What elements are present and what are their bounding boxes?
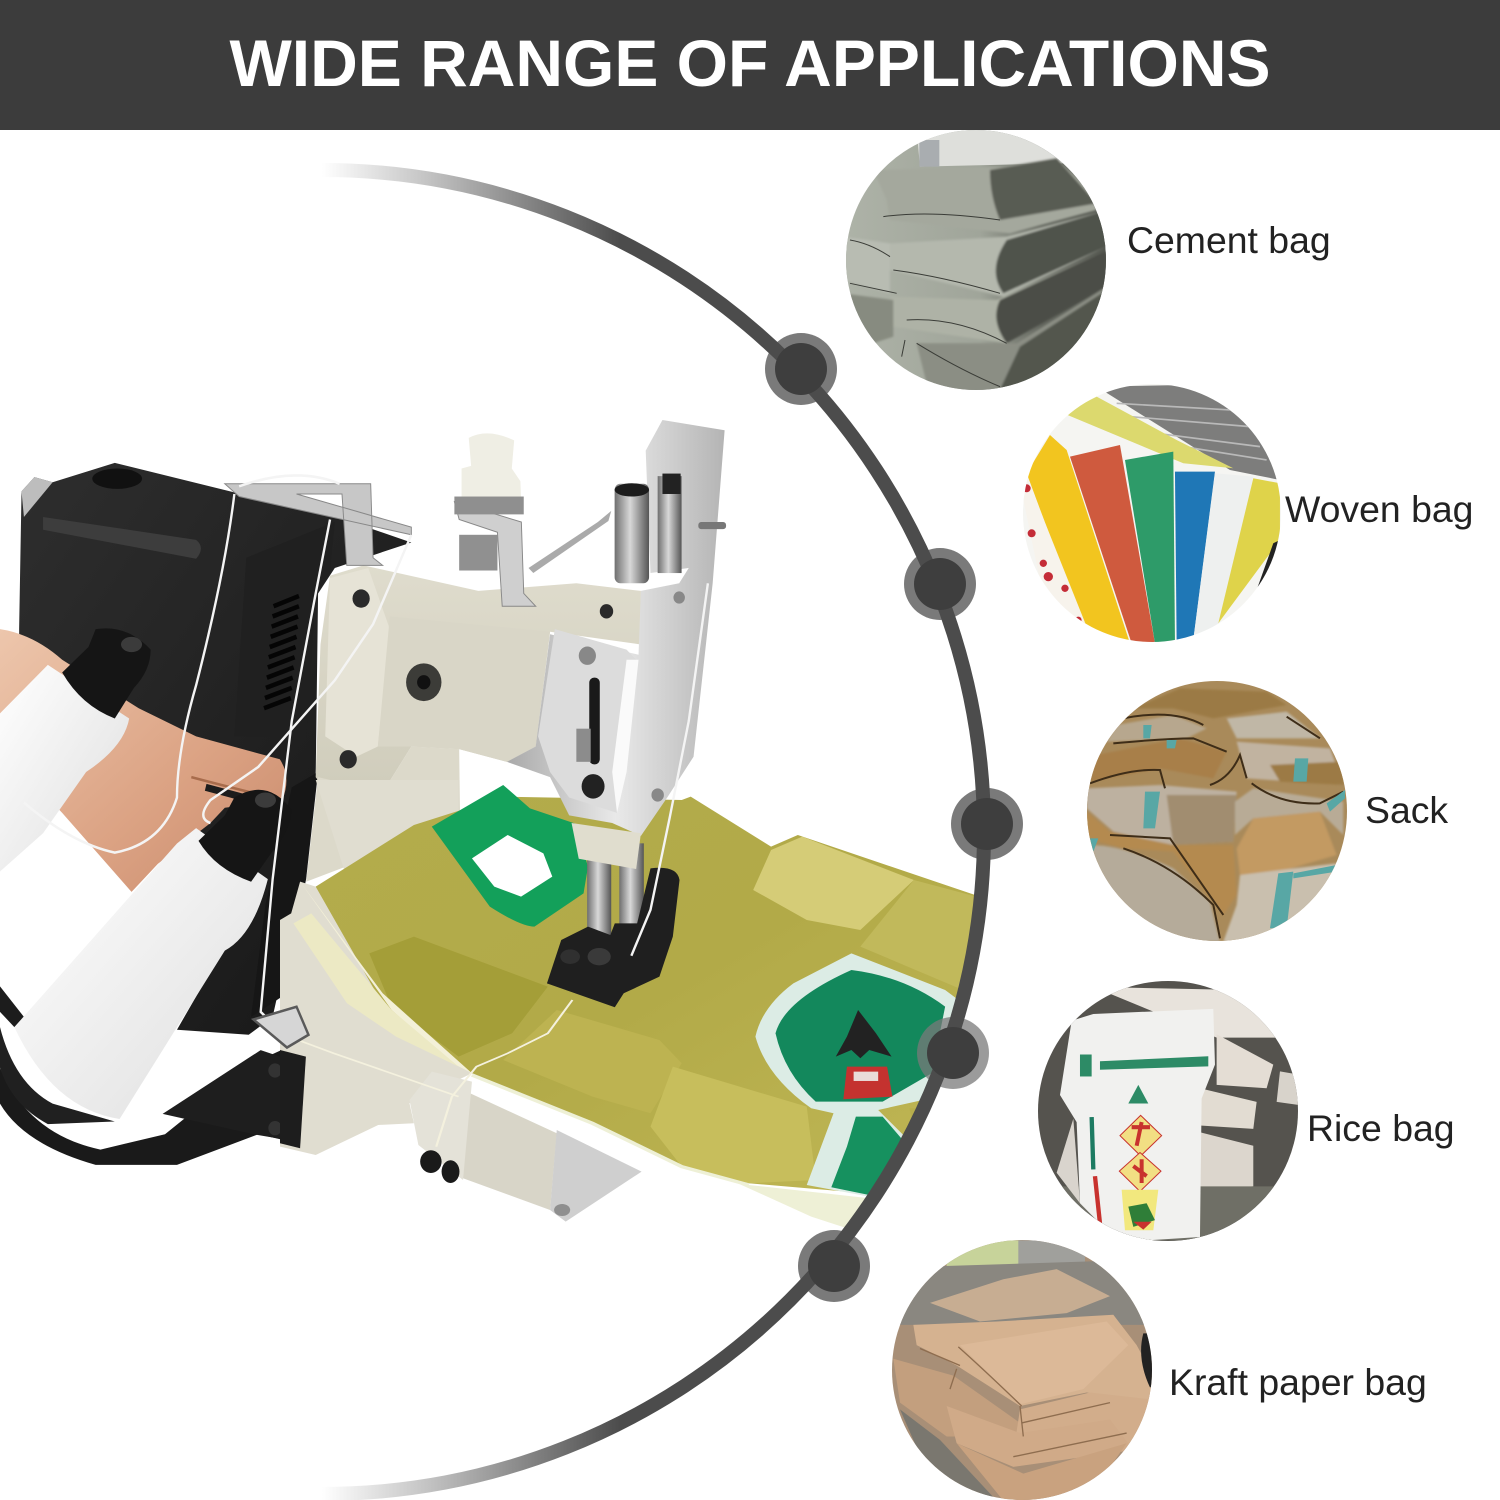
pale lower sheet [740,1184,866,1228]
label: kraft paper bag: Kraft paper bag [1169,1361,1427,1403]
header banner [0,0,1500,130]
label: woven bag: Woven bag [1285,488,1473,530]
fabric [316,797,980,1197]
needle rods [587,857,611,940]
node centres [775,343,1013,1292]
beige machine arm [316,565,641,798]
sewing thread [24,475,708,1042]
node rings [765,333,1023,1302]
bag thread [280,1000,572,1147]
green bag handle [432,785,588,927]
curved arc with node markers [322,170,1023,1494]
base casting [280,780,472,1155]
label: cement bag: Cement bag [1127,219,1331,261]
thread spools [0,628,292,1124]
base, woven bag, handle and presser foot [280,780,980,1228]
grip strap and lower handle [251,772,318,1017]
machine photo: handheld bag sewing machine [0,420,980,1228]
hand [0,629,286,892]
arc line [322,170,984,1494]
title: WIDE RANGE OF APPLICATIONS [230,26,1270,100]
label: sack: Sack [1365,789,1448,831]
photo: cement bags [846,130,1106,390]
photo: burlap sacks [1085,680,1350,945]
black motor housing [19,463,411,1035]
photo: rice bags [1035,980,1300,1245]
photo: kraft paper bags [890,1238,1157,1500]
thread guide and tension assembly [225,433,611,606]
gearbox [459,1090,557,1210]
label: rice bag: Rice bag [1307,1107,1455,1149]
bag logo [755,953,959,1197]
presser foot [547,868,680,1007]
fasteners [268,589,613,1135]
photo: woven bags [1020,380,1285,645]
steel plates and needle bar [507,420,726,869]
